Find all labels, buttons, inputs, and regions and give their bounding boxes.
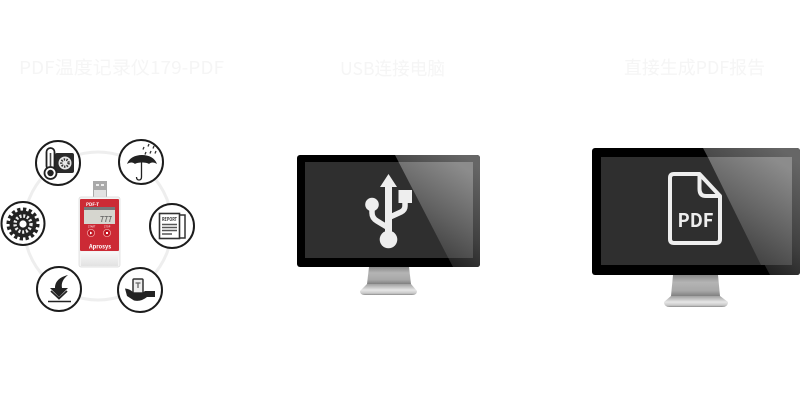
title: USB connection: USB连接电脑 <box>340 55 445 81</box>
icon: thermometer and freezer <box>36 141 80 185</box>
bezel glare <box>703 148 800 275</box>
icon: hand holding device <box>118 268 162 312</box>
panel: data logger with feature icons <box>2 140 194 312</box>
icon: PDF document: PDF <box>678 206 714 233</box>
monitor screen <box>305 162 473 258</box>
panel: monitor with PDF icon <box>592 148 800 307</box>
stop button: STOP <box>104 224 111 228</box>
LCD display: 777 <box>100 214 112 225</box>
monitor stand <box>360 267 417 295</box>
icon: umbrella and rain <box>119 140 163 184</box>
model label: PDF-T <box>86 202 99 208</box>
monitor bezel <box>297 155 480 267</box>
start button: START <box>88 224 96 228</box>
monitor bezel <box>592 148 800 275</box>
device body <box>79 197 120 267</box>
title: generate PDF report: 直接生成PDF报告 <box>624 54 765 80</box>
icon: report document: REPORT <box>162 216 177 223</box>
bezel glare <box>395 155 480 267</box>
USB plug <box>93 181 107 198</box>
icon: downward arrow onto surface <box>37 267 81 311</box>
panel: monitor with USB icon <box>297 155 480 295</box>
monitor screen <box>601 157 792 265</box>
monitor stand <box>664 275 728 307</box>
feature ring <box>24 152 172 300</box>
screen glare <box>708 157 792 265</box>
data logger device <box>79 181 120 267</box>
screen glare <box>399 162 473 258</box>
bottom panel <box>81 252 118 266</box>
icon: report document <box>150 204 194 248</box>
icon: USB symbol <box>365 174 412 248</box>
title: PDF logger: PDF温度记录仪179-PDF <box>19 54 224 80</box>
icon: gear <box>2 202 44 245</box>
icon: PDF document <box>670 174 720 243</box>
red face <box>80 199 119 251</box>
brand name: Aprosys <box>88 242 111 250</box>
